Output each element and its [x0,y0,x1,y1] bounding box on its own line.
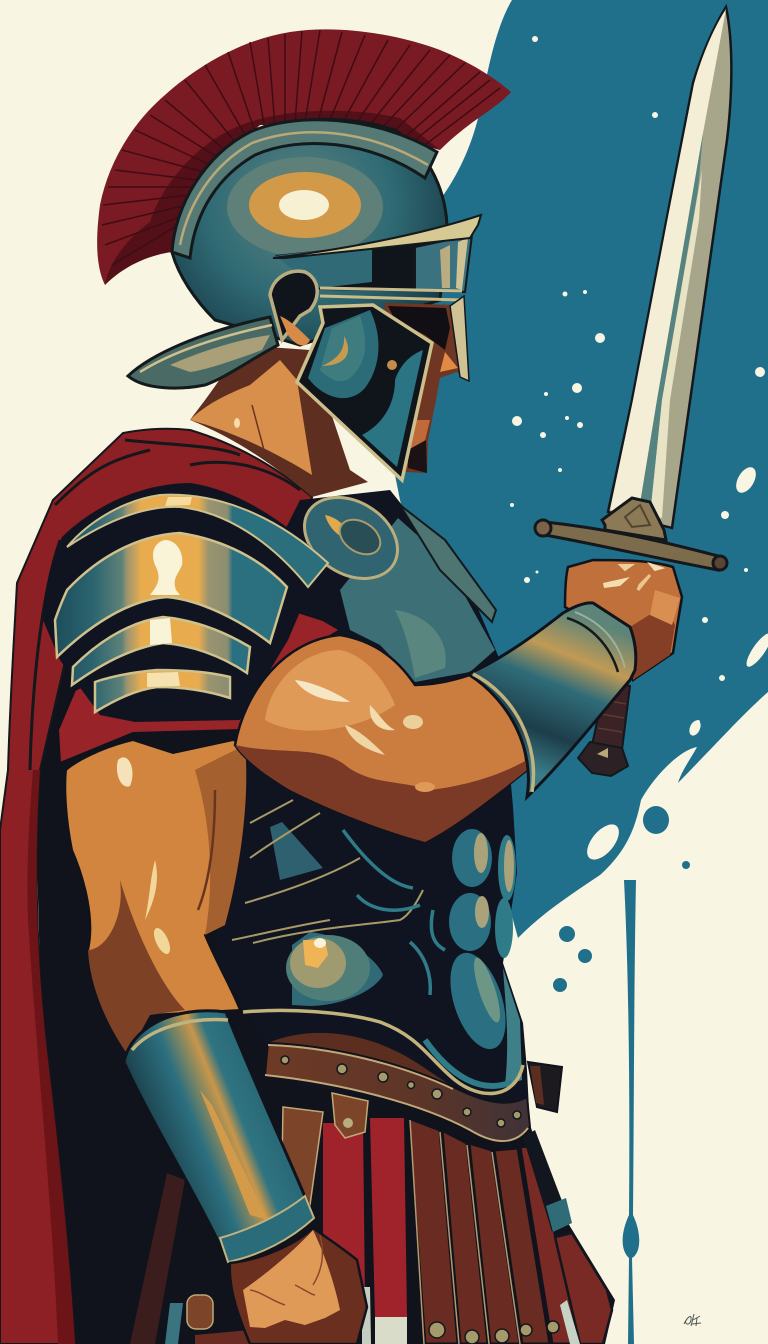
nose guard [450,296,469,381]
belt [265,1033,562,1142]
upper teal triangle [270,822,323,880]
cape [0,429,312,1344]
neck guard brim [128,317,278,388]
fist [565,560,682,680]
visor [415,235,472,292]
brown panel [282,1107,323,1205]
plume [97,29,511,285]
shoulder medallion [290,481,496,622]
red tunic sleeve [58,600,340,763]
armour trim lines [232,800,423,943]
visor underside [275,235,470,292]
far hand [555,1233,612,1344]
sword handle and pommel [578,680,630,776]
lower bracer [124,1011,314,1262]
wrist bracer [468,603,636,797]
sword blade [608,7,731,528]
hand [230,1228,367,1344]
pleated skirt [100,1080,615,1344]
upper arm [65,740,246,1055]
upper shoulder plate [67,495,328,587]
red pleats [323,1123,365,1300]
face [380,303,468,473]
forearm [235,635,527,842]
shoulder highlights [150,540,182,595]
abdominal muscles [440,829,522,1085]
artist signature [684,1314,701,1326]
buckle tab [332,1093,368,1138]
blue paint splash [360,0,768,1344]
round muscle highlight [286,932,383,1006]
helmet dome [172,119,447,345]
cheek guard [297,305,432,480]
sword guard [535,498,727,570]
brown pleats [408,1118,580,1344]
torso armour [215,490,530,1130]
shoulder plate three [95,670,230,712]
helmet crest band [172,120,437,258]
lower armour trim [425,1040,512,1086]
shoulder plate two [72,617,250,685]
chest plate [340,518,495,682]
neck [190,345,368,497]
helmet highlight [227,157,383,257]
side buckle tab [528,1062,562,1112]
left skirt details [130,1173,185,1344]
helmet [128,119,481,480]
ear [270,271,317,340]
shoulder plate one [55,533,287,657]
skirt studs [429,1321,559,1344]
far arm bracer [523,1130,570,1232]
shoulder armour [43,483,328,722]
